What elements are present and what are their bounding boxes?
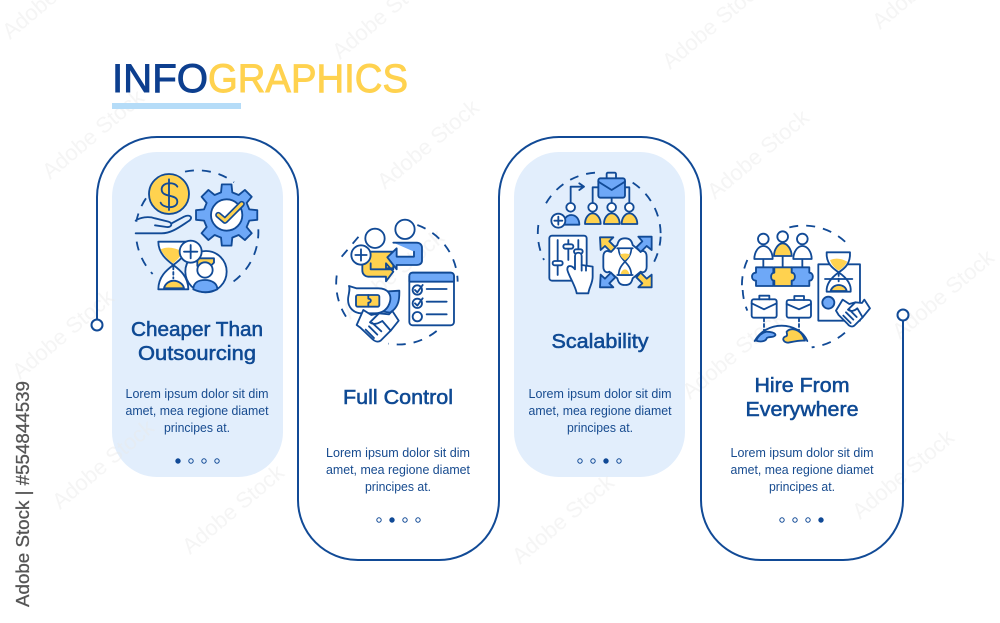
text block: card 3: principes at. [567,421,633,435]
icon: team control and checklist [336,220,458,344]
stock watermark label: Adobe Stock | #554844539 [12,381,33,607]
text block: card 3: Lorem ipsum dolor sit dim [528,387,672,401]
stock watermarks: Adobe Stock [847,424,960,524]
heading: Scalability: Scalability [552,330,649,353]
text block: card 2: amet, mea regione diamet [326,463,471,477]
stock watermarks: Adobe Stock [337,224,450,324]
heading: Hire From Everywhere: Hire From [754,374,850,397]
stock watermarks: Adobe Stock [677,304,790,404]
stock watermarks: Adobe Stock [702,104,815,204]
stock watermarks: Adobe Stock [47,414,160,514]
text block: card 1: amet, mea regione diamet [126,404,269,418]
title: INFO [112,57,208,101]
text block: card 2: Lorem ipsum dolor sit dim [326,446,470,460]
text block: card 4 [730,446,874,494]
text block: card 4: Lorem ipsum dolor sit dim [730,446,874,460]
text block: card 1: Lorem ipsum dolor sit dim [126,387,268,401]
text block: card 4: amet, mea regione diamet [730,463,874,477]
connector outline [92,137,908,560]
stock watermarks: Adobe Stock [887,244,1000,344]
icon: global hiring [742,226,870,347]
stock watermarks: Adobe Stock [37,84,150,184]
text block: card 3 [528,387,672,435]
text block: card 4: principes at. [769,480,835,494]
pagination dots: card 4 [780,518,823,522]
title: GRAPHICS [208,57,408,101]
text block: card 2: principes at. [365,480,431,494]
pagination dots: card 3 [578,459,621,463]
icon: scaling org chart and gear [538,173,661,293]
heading: Cheaper Than Outsourcing: Outsourcing [138,342,256,365]
icon: savings gear and hourglass [136,170,258,292]
title underline [112,103,241,109]
stock watermarks: Adobe Stock [507,469,620,569]
stock watermarks: Adobe Stock [372,94,485,194]
heading: Cheaper Than Outsourcing [131,318,263,365]
text block: card 1 [126,387,269,435]
text block: card 1: principes at. [164,421,230,435]
stock watermarks: Adobe Stock [177,459,290,559]
pagination dots: card 2 [377,518,420,522]
heading: Cheaper Than Outsourcing: Cheaper Than [131,318,263,341]
panel background: cards 1 and 3 [112,152,685,477]
heading: Full Control: Full Control [343,386,453,409]
text block: card 2 [326,446,471,494]
text block: card 3: amet, mea regione diamet [528,404,672,418]
stock watermarks: Adobe Stock [7,284,120,384]
heading: Hire From Everywhere [746,374,858,421]
heading: Hire From Everywhere: Everywhere [746,398,858,421]
pagination dots: card 1 [176,459,219,463]
title [112,57,408,101]
